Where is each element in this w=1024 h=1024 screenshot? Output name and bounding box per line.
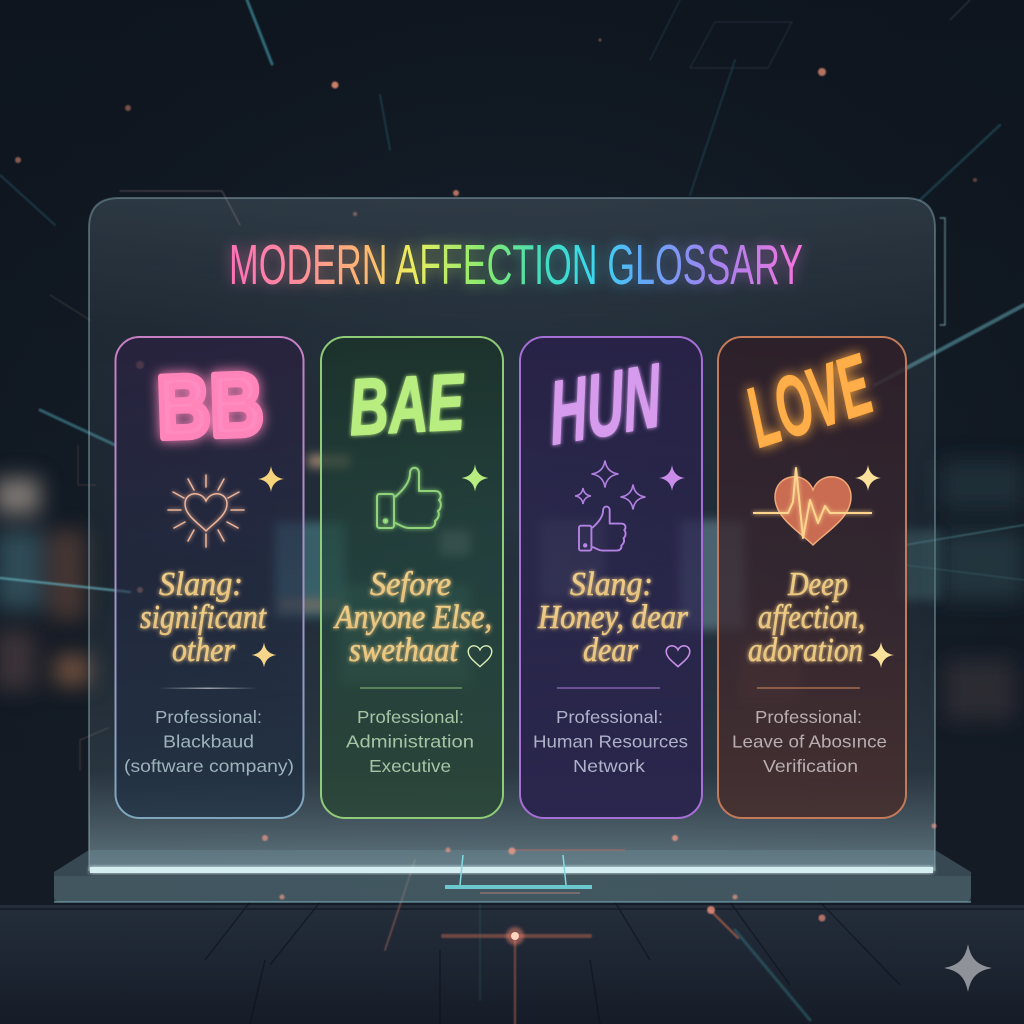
icon: heart with pulse xyxy=(753,468,872,545)
word: LOVE: LOVE xyxy=(735,336,884,466)
slang text xyxy=(748,566,865,669)
icon: thumbs up xyxy=(579,507,626,551)
sparkle xyxy=(855,465,881,491)
icon: sparkles xyxy=(575,460,646,510)
slang text xyxy=(333,566,492,669)
divider xyxy=(557,687,660,689)
glow dots xyxy=(15,38,977,593)
professional text xyxy=(124,707,294,776)
divider xyxy=(158,688,258,689)
sparkle xyxy=(252,642,276,668)
slang text: dear xyxy=(583,632,639,669)
sparkle xyxy=(659,465,685,491)
sparkle xyxy=(462,464,488,492)
card: HUN xyxy=(520,337,702,818)
icon: heart sun xyxy=(168,475,244,547)
floor xyxy=(0,860,1024,1024)
professional text: Blackbaud xyxy=(163,732,254,752)
professional text xyxy=(533,707,688,776)
professional text: Leave of Abosınce xyxy=(732,732,887,752)
professional text: (software company) xyxy=(124,756,294,776)
word: BB: BB xyxy=(155,354,265,457)
professional text: Human Resources xyxy=(533,732,688,752)
card: LOVE xyxy=(718,336,906,818)
slang text: affection, xyxy=(758,599,865,636)
slang text: significant xyxy=(140,599,267,636)
slang text: Slang: xyxy=(570,566,653,603)
slang text: Honey, dear xyxy=(537,599,689,636)
professional text: Verification xyxy=(763,756,858,776)
professional text: Administration xyxy=(346,732,474,752)
divider xyxy=(757,687,860,689)
slang text: other xyxy=(172,632,236,669)
card: BB xyxy=(116,337,304,818)
blurred city behind glass xyxy=(275,455,940,700)
slang text: Anyone Else, xyxy=(333,599,492,636)
word: BAE: BAE xyxy=(347,357,468,452)
professional text: Executive xyxy=(369,756,451,776)
professional text: Professional: xyxy=(755,707,862,727)
icon: heart xyxy=(666,646,690,667)
sparkle xyxy=(258,466,284,492)
glass base xyxy=(54,824,971,902)
slang text: swethaat xyxy=(349,632,459,669)
slang text xyxy=(140,566,267,669)
professional text: Professional: xyxy=(357,707,464,727)
sparkle xyxy=(868,642,894,668)
professional text: Professional: xyxy=(155,707,262,727)
icon: heart xyxy=(468,646,492,667)
streaks xyxy=(0,0,1024,770)
glass panel xyxy=(89,198,940,870)
card: BAE xyxy=(321,337,503,818)
slang text: adoration xyxy=(748,632,863,669)
word: HUN: HUN xyxy=(546,344,665,465)
slang text: Sefore xyxy=(370,566,451,603)
professional text xyxy=(346,707,474,776)
icon: thumbs up xyxy=(377,468,441,528)
professional text: Network xyxy=(573,756,645,776)
professional text xyxy=(732,707,887,776)
professional text: Professional: xyxy=(556,707,663,727)
slang text: Slang: xyxy=(159,566,243,603)
slang text: Deep xyxy=(787,566,848,603)
divider xyxy=(360,687,462,689)
watermark sparkle xyxy=(944,944,992,992)
slang text xyxy=(537,566,689,669)
